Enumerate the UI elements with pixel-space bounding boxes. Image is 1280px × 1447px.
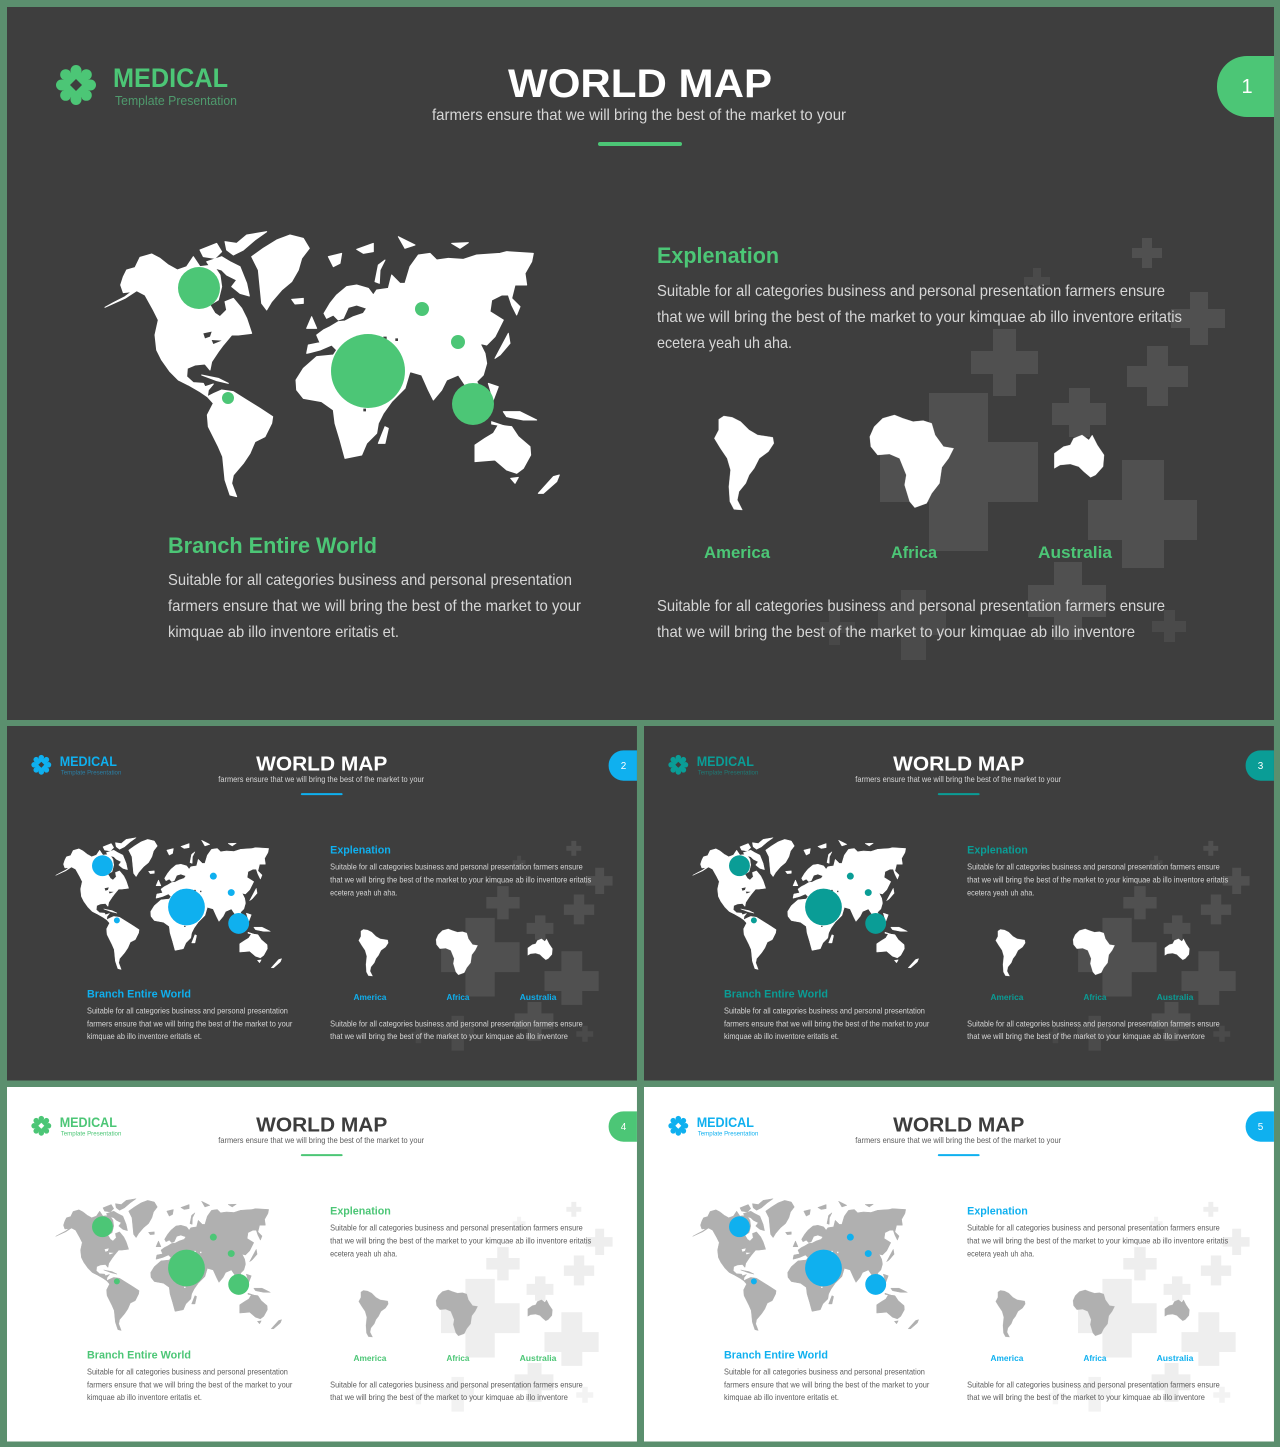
page number tab xyxy=(609,1111,637,1142)
label: America: America xyxy=(991,1353,1024,1363)
world map with data bubbles xyxy=(693,838,919,969)
text block: continents description xyxy=(330,1019,583,1041)
text block: explanation: Suitable for all categories business and personal presentation farmers ensure xyxy=(967,1224,1220,1233)
text block: branch description: Suitable for all categories business and personal presentation xyxy=(724,1006,925,1015)
text block: branch description xyxy=(87,1006,293,1041)
icon: Africa xyxy=(436,929,478,975)
label: Africa: Africa xyxy=(1084,992,1107,1002)
title: WORLD MAP xyxy=(256,754,387,776)
logo tagline: Template Presentation xyxy=(698,770,759,777)
world map with data bubbles xyxy=(693,1199,919,1330)
page number tab: 4 xyxy=(621,1122,627,1133)
text block: explanation: that we will bring the best of the market to your kimquae ab illo inventore eritatis xyxy=(967,876,1228,885)
logo tagline: Template Presentation xyxy=(115,93,237,108)
text block: branch description xyxy=(87,1367,293,1402)
text block: continents description: that we will bring the best of the market to your kimquae ab illo inventore xyxy=(330,1393,568,1402)
logo tagline: Template Presentation xyxy=(61,770,122,777)
label: Africa: Africa xyxy=(447,1353,470,1363)
label: Africa: Africa xyxy=(447,992,470,1002)
label: Australia: Australia xyxy=(520,992,557,1002)
world map with data bubbles xyxy=(56,1199,282,1330)
icon: Australia xyxy=(528,939,552,960)
text block: continents description xyxy=(330,1380,583,1402)
heading: explanation: Explenation xyxy=(330,1205,391,1217)
logo wordmark: MEDICAL xyxy=(60,754,117,769)
world map with data bubbles xyxy=(56,838,282,969)
text block: branch description: kimquae ab illo inventore eritatis et. xyxy=(724,1032,839,1041)
text block: explanation xyxy=(657,283,1182,352)
text block: explanation: that we will bring the best of the market to your kimquae ab illo inventore eritatis xyxy=(657,309,1182,326)
page number tab: 1 xyxy=(1241,76,1253,98)
icon: South America xyxy=(714,416,774,510)
text block: explanation xyxy=(967,1224,1228,1259)
icon: logo blue xyxy=(668,1116,688,1136)
icon: Africa xyxy=(436,1290,478,1336)
icon: South America xyxy=(996,1290,1025,1337)
text block: branch description: farmers ensure that we will bring the best of the market to your xyxy=(168,598,582,615)
logo tagline: Template Presentation xyxy=(61,1131,122,1138)
text block: branch description xyxy=(724,1367,930,1402)
label: Australia: Australia xyxy=(1038,543,1113,562)
text block: explanation: Suitable for all categories business and personal presentation farmers ensure xyxy=(330,863,583,872)
text block: explanation: that we will bring the best of the market to your kimquae ab illo inventore eritatis xyxy=(330,876,591,885)
label: Australia: Australia xyxy=(520,1353,557,1363)
title: WORLD MAP xyxy=(893,754,1024,776)
label: America: America xyxy=(704,543,771,562)
label: America: America xyxy=(354,992,387,1002)
text block: branch description: kimquae ab illo inventore eritatis et. xyxy=(87,1393,202,1402)
text block: explanation: ecetera yeah uh aha. xyxy=(330,889,397,898)
heading: branch entire world: Branch Entire World xyxy=(724,988,828,1000)
heading: branch entire world: Branch Entire World xyxy=(87,988,191,1000)
page number tab xyxy=(609,750,637,781)
text block: explanation: ecetera yeah uh aha. xyxy=(967,1250,1034,1259)
icon: logo blue xyxy=(31,755,51,775)
page number tab: 5 xyxy=(1258,1122,1264,1133)
text block: continents description: Suitable for all categories business and personal presentation farmers ensure xyxy=(967,1380,1220,1389)
icon: Africa xyxy=(1073,929,1115,975)
page number tab: 2 xyxy=(621,761,627,772)
icon: South America xyxy=(359,1290,388,1337)
label: Africa: Africa xyxy=(1084,1353,1107,1363)
decorative crosses xyxy=(820,238,1225,660)
text block: explanation xyxy=(330,1224,591,1259)
icon: Africa xyxy=(1073,1290,1115,1336)
text block: continents description: Suitable for all categories business and personal presentation farmers ensure xyxy=(330,1380,583,1389)
page number tab xyxy=(1246,1111,1274,1142)
heading: explanation: Explenation xyxy=(967,844,1028,856)
text block: explanation xyxy=(967,863,1228,898)
world map with data bubbles xyxy=(105,232,559,497)
subtitle: farmers ensure that we will bring the best of the market to your xyxy=(855,1136,1061,1145)
logo wordmark: MEDICAL xyxy=(113,63,228,93)
text block: branch description: farmers ensure that we will bring the best of the market to your xyxy=(724,1380,930,1389)
label: America: America xyxy=(991,992,1024,1002)
text block: continents description xyxy=(967,1019,1220,1041)
icon: Australia xyxy=(1165,939,1189,960)
icon: South America xyxy=(996,929,1025,976)
panel: small dark slide, teal xyxy=(644,726,1274,1081)
heading: branch entire world: Branch Entire World xyxy=(724,1349,828,1361)
logo wordmark: MEDICAL xyxy=(697,1115,754,1130)
icon: Australia xyxy=(1165,1300,1189,1321)
icon: Australia xyxy=(1054,435,1104,477)
title: WORLD MAP xyxy=(256,1115,387,1137)
label: Africa: Africa xyxy=(891,543,938,562)
text block: explanation: that we will bring the best of the market to your kimquae ab illo inventore eritatis xyxy=(330,1237,591,1246)
subtitle: farmers ensure that we will bring the best of the market to your xyxy=(855,775,1061,784)
logo wordmark: MEDICAL xyxy=(697,754,754,769)
logo wordmark: MEDICAL xyxy=(60,1115,117,1130)
icon: medical flower logo xyxy=(56,65,96,105)
text block: branch description: Suitable for all categories business and personal presentation xyxy=(168,572,572,589)
text block: continents description: that we will bring the best of the market to your kimquae ab illo inventore xyxy=(967,1393,1205,1402)
text block: branch description: kimquae ab illo inventore eritatis et. xyxy=(168,624,399,641)
page number tab xyxy=(1217,56,1274,117)
icon: Africa xyxy=(870,415,954,508)
text block: branch description xyxy=(168,572,582,641)
icon: logo teal xyxy=(668,755,688,775)
text block: branch description: farmers ensure that we will bring the best of the market to your xyxy=(87,1380,293,1389)
text block: continents description: Suitable for all categories business and personal presentation farmers ensure xyxy=(330,1019,583,1028)
heading: explanation: Explenation xyxy=(657,243,779,268)
icon: South America xyxy=(359,929,388,976)
text block: continents description: that we will bring the best of the market to your kimquae ab illo inventore xyxy=(967,1032,1205,1041)
panel: small light slide, green xyxy=(7,1087,637,1442)
text block: explanation: ecetera yeah uh aha. xyxy=(657,335,792,352)
text block: explanation: that we will bring the best of the market to your kimquae ab illo inventore eritatis xyxy=(967,1237,1228,1246)
page number tab xyxy=(1246,750,1274,781)
text block: continents description xyxy=(657,598,1165,641)
subtitle: farmers ensure that we will bring the best of the market to your xyxy=(432,107,847,124)
text block: branch description: Suitable for all categories business and personal presentation xyxy=(87,1367,288,1376)
text block: continents description: that we will bring the best of the market to your kimquae ab illo inventore xyxy=(657,624,1135,641)
label: Australia: Australia xyxy=(1157,992,1194,1002)
text block: branch description: kimquae ab illo inventore eritatis et. xyxy=(724,1393,839,1402)
text block: branch description: kimquae ab illo inventore eritatis et. xyxy=(87,1032,202,1041)
label: America: America xyxy=(354,1353,387,1363)
text block: explanation: ecetera yeah uh aha. xyxy=(330,1250,397,1259)
text block: continents description: that we will bring the best of the market to your kimquae ab illo inventore xyxy=(330,1032,568,1041)
panel: small light slide, blue xyxy=(644,1087,1274,1442)
text block: explanation: ecetera yeah uh aha. xyxy=(967,889,1034,898)
heading: explanation: Explenation xyxy=(330,844,391,856)
heading: branch entire world: Branch Entire World xyxy=(168,533,377,558)
icon: Australia xyxy=(528,1300,552,1321)
text block: branch description xyxy=(724,1006,930,1041)
text block: continents description: Suitable for all categories business and personal presentation farmers ensure xyxy=(657,598,1165,615)
logo tagline: Template Presentation xyxy=(698,1131,759,1138)
text block: branch description: farmers ensure that we will bring the best of the market to your xyxy=(87,1019,293,1028)
title: WORLD MAP xyxy=(508,62,772,106)
subtitle: farmers ensure that we will bring the best of the market to your xyxy=(218,775,424,784)
subtitle: farmers ensure that we will bring the best of the market to your xyxy=(218,1136,424,1145)
text block: explanation: Suitable for all categories business and personal presentation farmers ensure xyxy=(967,863,1220,872)
heading: explanation: Explenation xyxy=(967,1205,1028,1217)
text block: branch description: Suitable for all categories business and personal presentation xyxy=(87,1006,288,1015)
title: WORLD MAP xyxy=(893,1115,1024,1137)
text block: branch description: Suitable for all categories business and personal presentation xyxy=(724,1367,925,1376)
page number tab: 3 xyxy=(1258,761,1264,772)
panel: small dark slide, blue xyxy=(7,726,637,1081)
panel: large dark slide, green xyxy=(7,7,1274,720)
text block: explanation xyxy=(330,863,591,898)
text block: continents description: Suitable for all categories business and personal presentation farmers ensure xyxy=(967,1019,1220,1028)
text block: continents description xyxy=(967,1380,1220,1402)
heading: branch entire world: Branch Entire World xyxy=(87,1349,191,1361)
icon: logo green xyxy=(31,1116,51,1136)
text block: explanation: Suitable for all categories business and personal presentation farmers ensure xyxy=(330,1224,583,1233)
label: Australia: Australia xyxy=(1157,1353,1194,1363)
text block: branch description: farmers ensure that we will bring the best of the market to your xyxy=(724,1019,930,1028)
text block: explanation: Suitable for all categories business and personal presentation farmers ensure xyxy=(657,283,1165,300)
